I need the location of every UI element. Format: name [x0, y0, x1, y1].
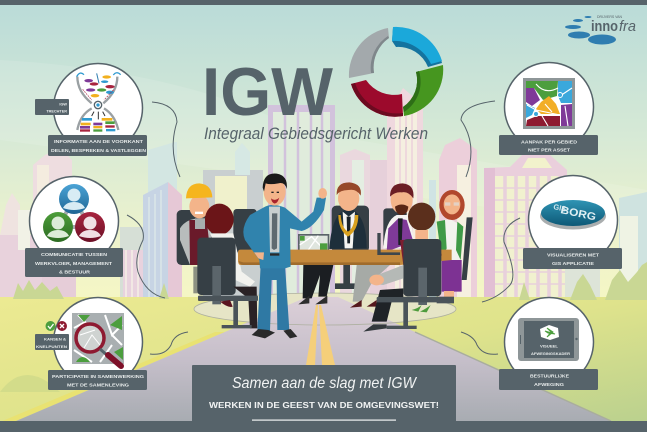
- label: informatie: DELEN, BESPREKEN & VASTLEGGEN: [51, 148, 147, 154]
- label: kansen en knelpunten: KANSEN &: [44, 338, 66, 342]
- trechter diagram: [77, 73, 121, 132]
- label: kansen en knelpunten: [35, 334, 69, 350]
- label: informatie: [48, 135, 147, 156]
- meeting scene: [177, 174, 473, 338]
- panel: bestuurlijke afweging: [499, 298, 598, 390]
- circle: [54, 64, 142, 152]
- triangle connector: [58, 199, 90, 227]
- road centre lines: [306, 305, 335, 365]
- presenter in blue suit: [243, 174, 327, 338]
- label: communicatie: & BESTUUR: [59, 270, 91, 276]
- label: IGW trechter: TRECHTER: [46, 110, 67, 114]
- icon: blue person: [59, 184, 89, 214]
- panel: IGW trechter: [35, 64, 147, 156]
- top bar: [0, 0, 647, 5]
- background city skyline: [0, 88, 647, 297]
- background clouds: [0, 60, 647, 230]
- panel: aanpak per gebied: [499, 62, 598, 155]
- background sky: [0, 0, 647, 300]
- icon: cross: [57, 321, 67, 331]
- circle: [30, 176, 118, 266]
- label: bestuurlijke afweging: AFWEGING: [534, 382, 564, 388]
- label: informatie: INFORMATIE AAN DE VOORKANT: [54, 139, 143, 145]
- label: visualiseren: [523, 248, 622, 269]
- label: kansen en knelpunten: KNELPUNTEN: [36, 345, 67, 349]
- GIS BORG button: GIS: [553, 202, 567, 214]
- tablet icon: [518, 318, 579, 361]
- label: participatie: MET DE SAMENLEVING: [67, 382, 129, 388]
- label: bestuurlijke afweging: [499, 369, 598, 390]
- innofra logo: [565, 15, 636, 44]
- innofra logo: inno: [591, 18, 618, 35]
- title IGW: IGW: [202, 54, 334, 130]
- innofra logo: DRIJVERS VAN: [597, 15, 622, 19]
- area map icon: [523, 78, 575, 129]
- worker with helmet: [180, 183, 212, 265]
- laptop: [296, 234, 330, 255]
- mayor: [298, 182, 367, 304]
- label: participatie: [48, 370, 147, 390]
- label: IGW trechter: IGW: [59, 102, 67, 106]
- bottom banner: WERKEN IN DE GEEST VAN DE OMGEVINGSWET!: [209, 401, 439, 410]
- label: visualiseren: VISUALISEREN MET: [547, 252, 599, 258]
- GIS BORG button: [540, 200, 606, 230]
- circle: [54, 298, 142, 386]
- label: IGW trechter: [35, 99, 69, 115]
- table carpet: [194, 293, 456, 325]
- label: bestuurlijke afweging: BESTUURLIJKE: [530, 374, 570, 380]
- table: [238, 250, 452, 265]
- map with magnifier: [72, 313, 124, 366]
- back chairs: [177, 206, 473, 293]
- label: visualiseren: GIS APPLICATIE: [552, 261, 595, 267]
- icon: check: [46, 321, 56, 331]
- label: aanpak: AANPAK PER GEBIED: [521, 140, 578, 146]
- bottom banner: [192, 365, 456, 425]
- panel: GIS applicatie: [523, 176, 622, 269]
- bottom banner: Samen aan de slag met IGW: [232, 375, 418, 392]
- icon: green person: [43, 212, 73, 242]
- bottom bar: [0, 421, 647, 432]
- man on right chair: [363, 203, 442, 332]
- IGW ring logo: [349, 27, 443, 117]
- label: aanpak: NIET PER ASSET: [528, 148, 570, 154]
- tablet icon: VISUEEL: [540, 344, 558, 348]
- bushes: [0, 262, 647, 392]
- chair left front with woman: [197, 204, 258, 328]
- road: [16, 297, 611, 421]
- connector curves: [127, 101, 520, 354]
- panel: communicatie: [25, 176, 123, 277]
- woman with glasses: [412, 190, 465, 312]
- label: aanpak: [499, 135, 598, 155]
- circle: [528, 176, 618, 264]
- tablet icon: AFWEGINGSKADER: [531, 352, 571, 356]
- ground: [0, 297, 647, 427]
- circle: [504, 298, 594, 386]
- subtitle: Integraal Gebiedsgericht Werken: [204, 124, 428, 143]
- label: communicatie: [25, 248, 123, 277]
- road shoulder: [0, 332, 225, 422]
- bearded man: [350, 183, 415, 308]
- GIS BORG button: BORG: [559, 204, 597, 223]
- label: communicatie: WERKVLOER, MANAGEMENT: [35, 261, 112, 267]
- second laptop: [377, 233, 400, 255]
- icon: red person: [75, 212, 105, 242]
- circle: [504, 62, 594, 152]
- innofra logo: fra: [619, 18, 636, 35]
- panel: participatie: [35, 298, 147, 390]
- label: communicatie: COMMUNICATIE TUSSEN: [41, 252, 108, 258]
- label: participatie: PARTICIPATIE IN SAMENWERKING: [52, 374, 144, 380]
